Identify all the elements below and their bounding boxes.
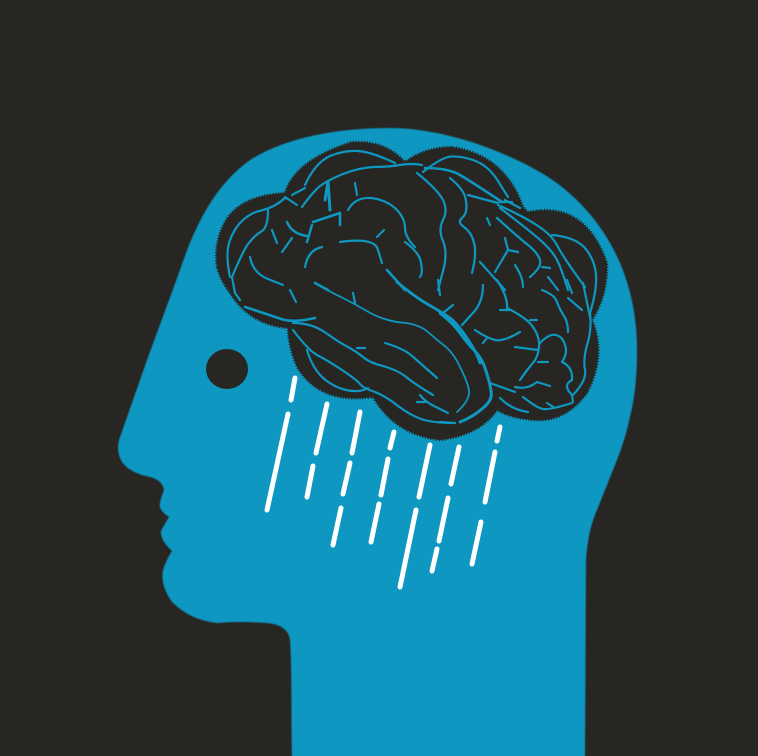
brain folds <box>228 151 596 423</box>
brain cloud <box>216 142 607 440</box>
rain <box>267 378 500 587</box>
eye <box>206 349 248 389</box>
head silhouette <box>118 128 637 756</box>
